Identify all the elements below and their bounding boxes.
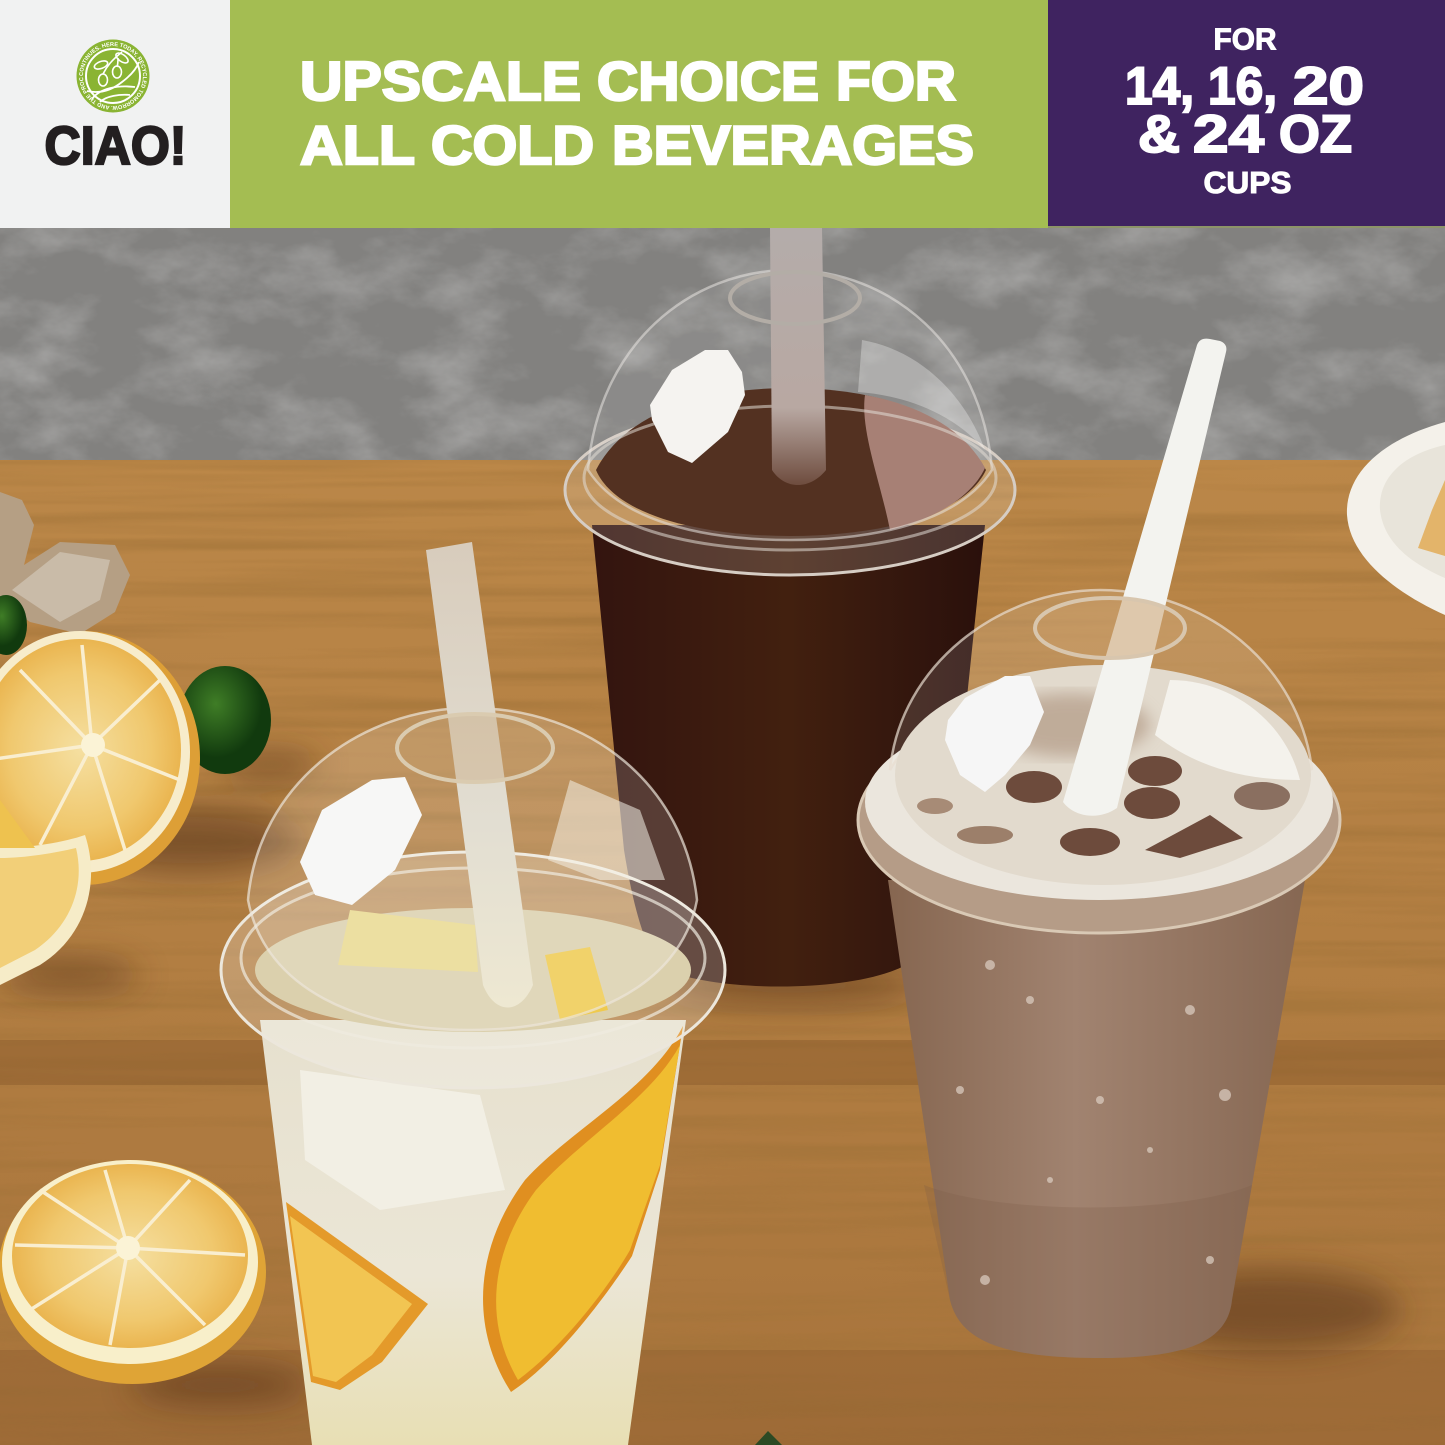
cup sizes text: 16,: [1208, 57, 1277, 116]
drink in dome: [255, 908, 691, 1032]
dome highlight: [858, 340, 985, 450]
photo: white plate with food: [1347, 422, 1445, 615]
cup sizes text: 24: [1193, 105, 1265, 164]
straw hole: [730, 272, 860, 324]
cup body: [888, 880, 1305, 1358]
sticker: [945, 676, 1044, 792]
straw: [1063, 339, 1226, 816]
straw: [426, 542, 533, 1008]
rim inner line: [241, 868, 705, 1048]
foam in dome: [895, 665, 1311, 885]
lid rim: [858, 707, 1340, 933]
photo: glass dish: [0, 492, 130, 634]
straw: [770, 228, 826, 485]
photo: lemon half upper: [0, 631, 200, 885]
ice cube: [300, 1070, 505, 1210]
cup: dark iced tea: [565, 228, 1015, 986]
orange slice left: [286, 1202, 428, 1390]
reflection in liquid: [864, 395, 985, 530]
photo: lemon half lower: [0, 1160, 266, 1384]
photo: marble wall: [0, 228, 1445, 463]
icon: olive branch badge: [76, 40, 150, 112]
headline text: COLD: [431, 114, 594, 176]
headline text: CHOICE: [597, 50, 819, 112]
cup sizes text: 20: [1293, 57, 1364, 116]
photo: wooden table: [0, 460, 1445, 1445]
lid rim: [565, 405, 1015, 575]
dome highlight: [548, 780, 665, 880]
rim inner line: [584, 406, 996, 550]
cup sizes text: &: [1138, 105, 1180, 164]
photo: leaf at bottom: [755, 1431, 782, 1445]
dome lid: [588, 270, 992, 540]
cup sizes text: OZ: [1279, 105, 1352, 164]
headline text: [300, 50, 974, 176]
orange slice right: [483, 1026, 683, 1392]
headline text: BEVERAGES: [612, 114, 974, 176]
cup body: [592, 525, 985, 986]
foam band: [865, 704, 1333, 900]
cup: milk tea: [858, 339, 1340, 1358]
logo wordmark: CIAO!: [44, 116, 186, 176]
cup: lemon drink: [221, 542, 725, 1445]
boba pearls: [917, 756, 1290, 858]
panel: logo: [0, 0, 230, 228]
panel: cup sizes: [1048, 0, 1445, 228]
dome lid: [890, 590, 1312, 770]
liquid under dome: [596, 388, 986, 536]
lid rim: [221, 852, 725, 1088]
headline text: FOR: [836, 50, 956, 112]
photo: lime: [0, 595, 271, 774]
headline text: UPSCALE: [300, 50, 581, 112]
sticker: [300, 777, 422, 905]
photo: lemon wedge: [0, 800, 91, 985]
headline text: ALL: [300, 114, 415, 176]
photo: table shadows: [0, 751, 1400, 1405]
cup sizes text: 14,: [1125, 57, 1194, 116]
straw hole: [397, 714, 553, 782]
droplets: [956, 960, 1231, 1285]
cup body: [260, 1020, 686, 1445]
cup sizes text: [1125, 22, 1364, 200]
lemon pieces: [338, 910, 608, 1020]
sticker: [650, 350, 745, 463]
panel: headline: [230, 0, 1048, 228]
foam highlight: [1155, 680, 1300, 780]
brown show-through: [990, 693, 1150, 757]
straw hole: [1035, 598, 1185, 658]
lower band: [924, 1185, 1252, 1358]
dome lid: [248, 708, 697, 1030]
cup sizes text: CUPS: [1204, 165, 1292, 200]
cup sizes text: FOR: [1214, 22, 1276, 56]
